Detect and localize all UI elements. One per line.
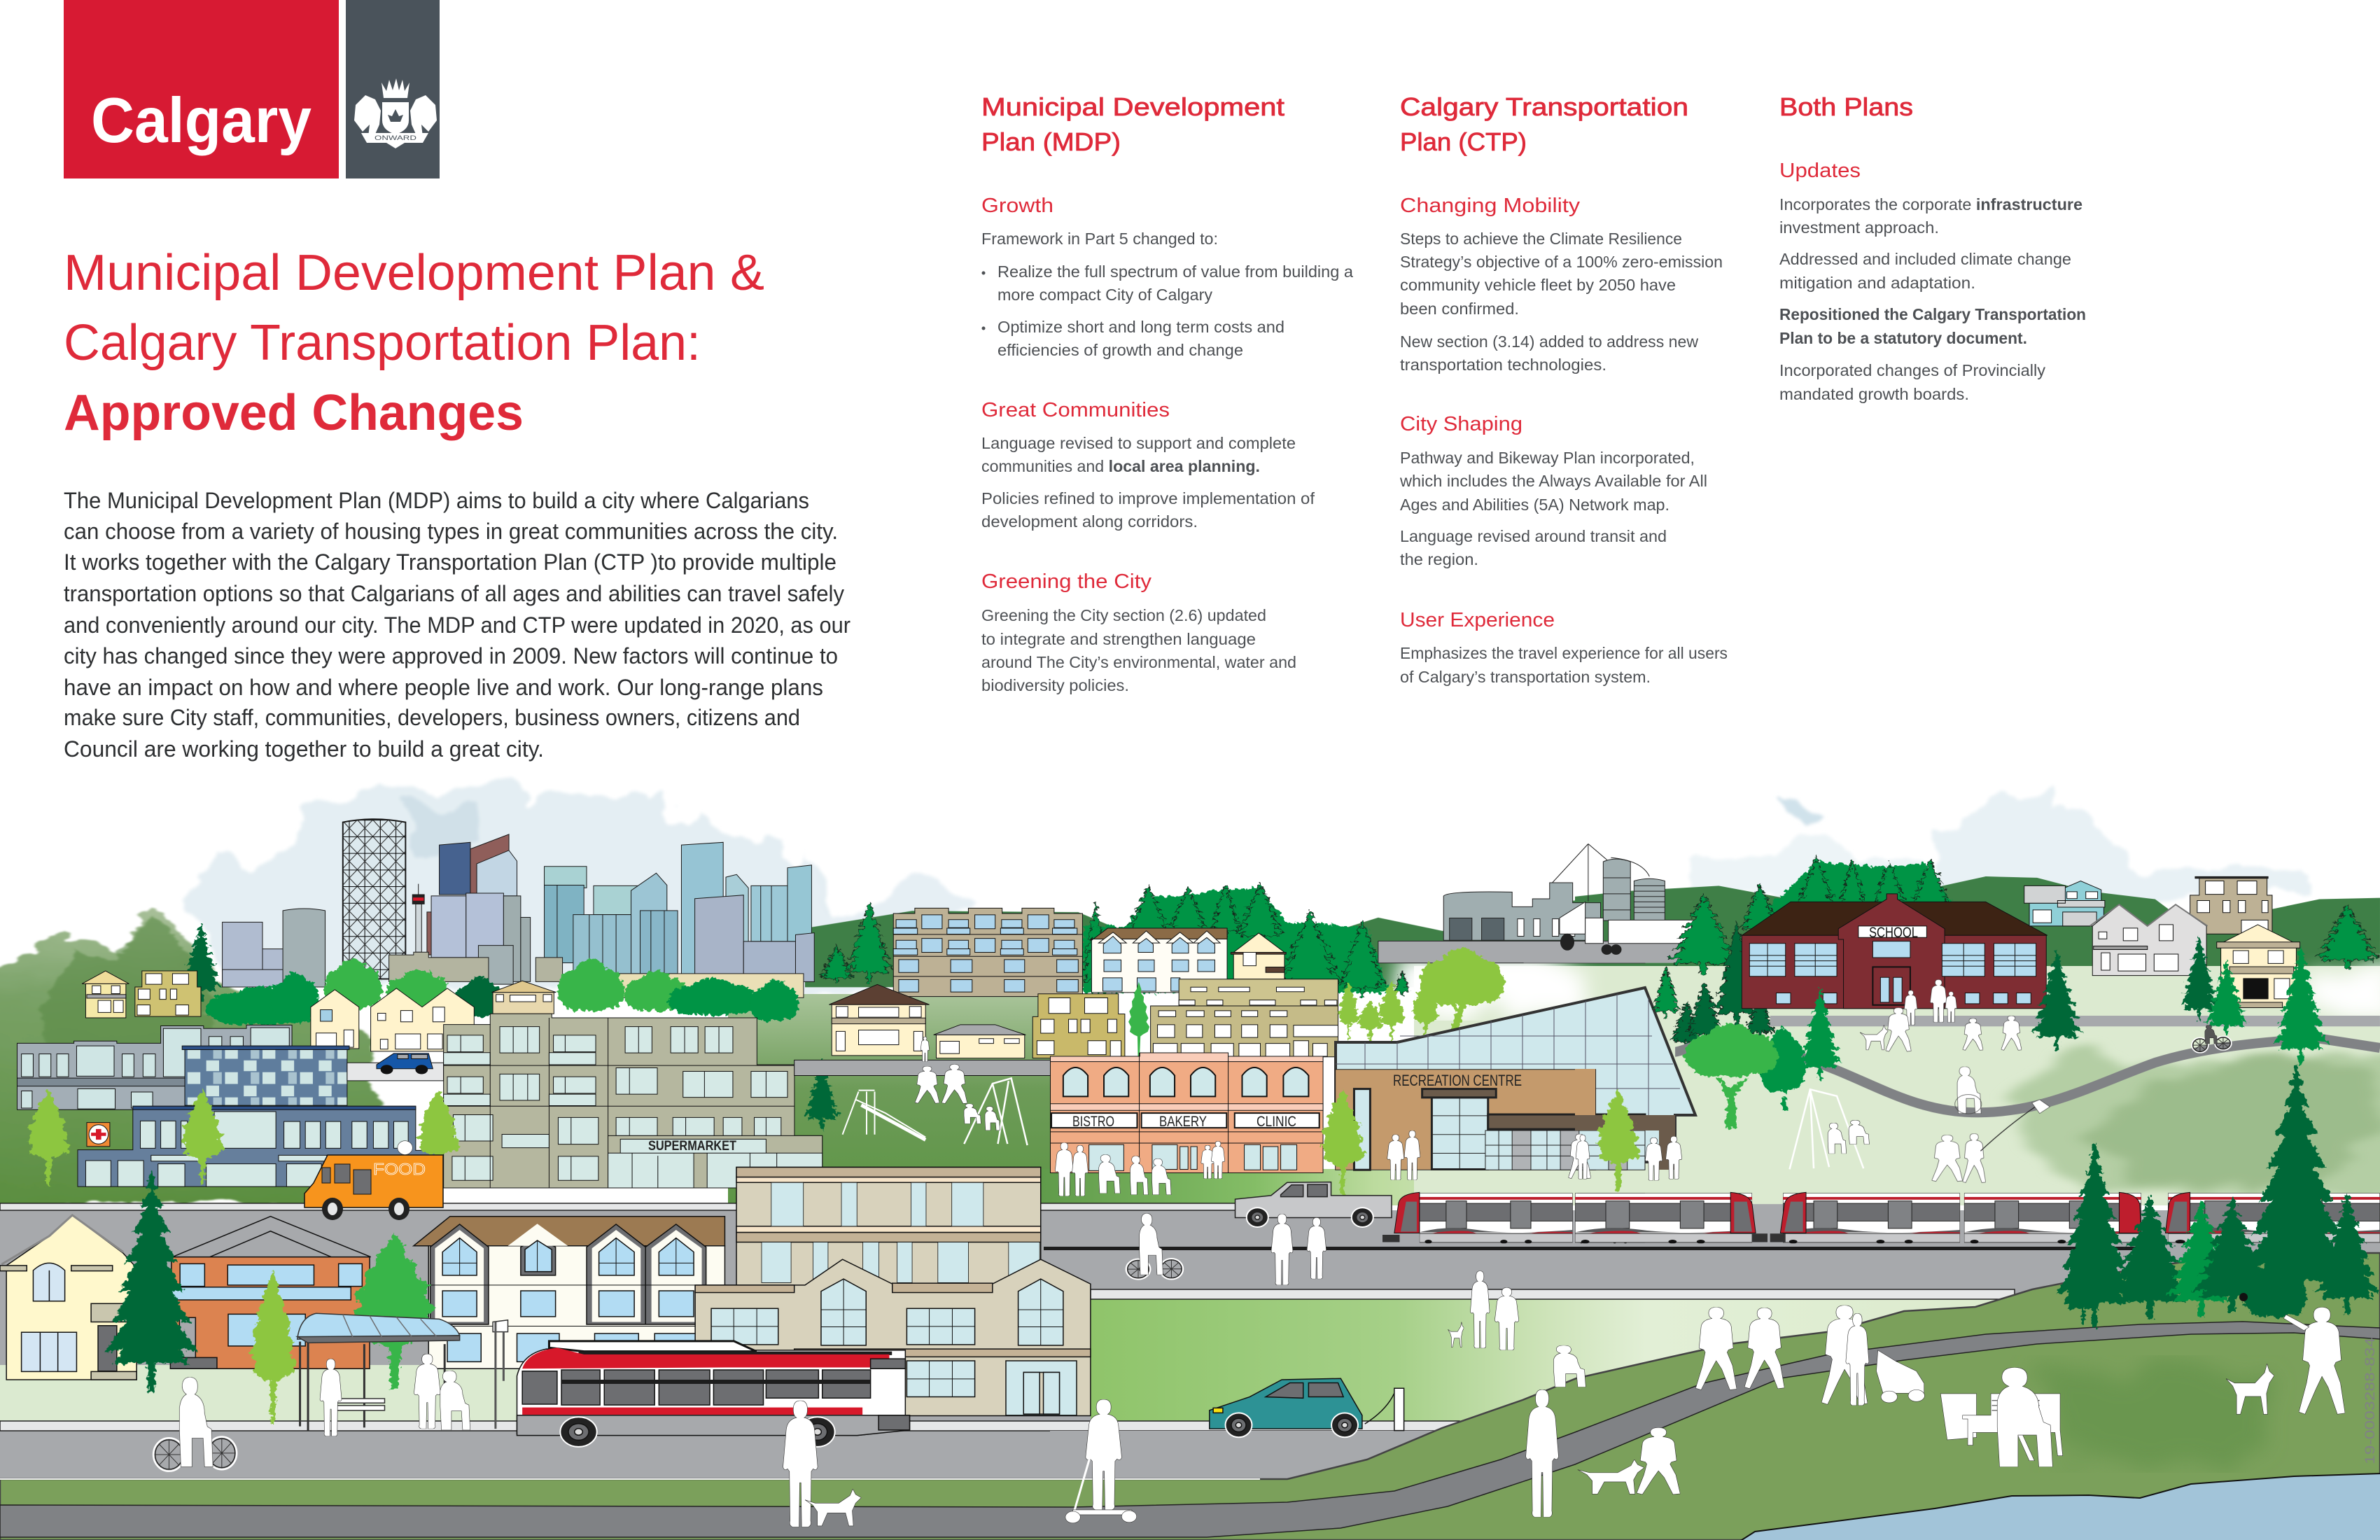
- heading: MDP: Municipal Development: [981, 92, 1284, 121]
- bungalow: [934, 1025, 1026, 1058]
- section: User Experience: of Calgary’s transportation system.: [1400, 668, 1651, 686]
- people: upper park and shops: [398, 979, 2231, 1196]
- truck label: FOOD: [373, 1160, 426, 1178]
- park pathway: [0, 1322, 2380, 1537]
- column: Both Plans: [1779, 92, 2086, 403]
- supermarket sign: SUPERMARKET: [648, 1139, 736, 1154]
- dog on leash: [805, 1489, 861, 1526]
- logo: City of Calgary: [64, 0, 440, 178]
- section: Changing Mobility: New section (3.14) added to address new: [1400, 332, 1699, 351]
- road surface: [0, 1210, 2380, 1479]
- document code: 19-0003288-8340: [2363, 1328, 2378, 1464]
- section: Great Communities: development along corridors.: [981, 512, 1198, 531]
- title: Calgary Transportation Plan:: [64, 315, 701, 371]
- school sign: SCHOOL: [1869, 925, 1918, 941]
- scooter riders: [1271, 1214, 1326, 1285]
- lower townhouses: [414, 1217, 724, 1368]
- icon: coat of arms: ONWARD: [374, 134, 417, 141]
- wash: central park: [728, 994, 1064, 1204]
- road bend at hill: [1050, 1431, 1449, 1479]
- upper-left houses and blocks: [17, 971, 840, 1188]
- intro text block: can choose from a variety of housing types in great communities across the city.: [64, 519, 838, 544]
- olive apartment: [135, 971, 201, 1016]
- section: City Shaping: Pathway and Bikeway Plan incorporated,: [1400, 449, 1695, 467]
- olive townhouse: [2190, 876, 2272, 934]
- checker facade: [182, 1046, 349, 1105]
- section: Great Communities: Policies refined to improve implementation of: [981, 489, 1315, 507]
- section: Growth: Framework in Part 5 changed to:: [981, 230, 1218, 248]
- lawn lower left: [0, 1365, 546, 1421]
- section: Updates: Repositioned the Calgary Transportation: [1779, 305, 2086, 323]
- houses upper right: [2024, 876, 2300, 1008]
- family at school: [1860, 979, 1956, 1051]
- midground conifers behind townhouses: [820, 883, 1410, 998]
- wheelchair user: [1955, 1067, 1982, 1114]
- slide: [843, 1091, 925, 1140]
- heading: Both Plans: Both Plans: [1779, 92, 1913, 121]
- waiting passengers: [320, 1354, 470, 1436]
- rec centre east end: [1575, 1115, 1675, 1170]
- trees behind recreation centre: [1338, 948, 1505, 1044]
- meadow road and winding path: [1675, 1016, 2380, 1112]
- section: Updates: mitigation and adaptation.: [1779, 274, 1975, 292]
- heading: CTP: [1400, 92, 1688, 156]
- shop signs: CLINIC: [1256, 1114, 1296, 1130]
- upper-left neighbourhood trees: [179, 923, 799, 1026]
- section: Updates: Updates: [1779, 160, 1861, 182]
- light-rail trains: [1382, 1192, 2380, 1244]
- section: User Experience: [1400, 609, 1728, 686]
- section: Changing Mobility: Steps to achieve the Climate Resilience: [1400, 230, 1682, 248]
- section: Growth: more compact City of Calgary: [997, 286, 1212, 304]
- intro text block: have an impact on how and where people live and work. Our long-range plans: [64, 675, 823, 700]
- heading: CTP: Calgary Transportation: [1400, 92, 1688, 121]
- meadow cyclist: [2192, 1025, 2231, 1052]
- logo wordmark: Calgary: [91, 85, 312, 156]
- runners: [1695, 1307, 1784, 1390]
- neighbourhood road: [794, 1060, 1051, 1076]
- school: [1742, 894, 2047, 1009]
- intro text block: Council are working together to build a great city.: [64, 736, 544, 762]
- heading: MDP: [981, 92, 1284, 156]
- foreground conifers right: [2055, 1064, 2380, 1328]
- grey-blue mid-rise: [17, 1025, 292, 1110]
- shops: Bistro Bakery Clinic: [1051, 1053, 1323, 1172]
- section: User Experience: User Experience: [1400, 609, 1555, 631]
- swing set: [964, 1078, 1028, 1145]
- meadow trees: [1684, 935, 2329, 1128]
- dog and crouching person: [1578, 1427, 1680, 1494]
- heading: MDP: Plan (MDP): [981, 127, 1121, 156]
- intro text block: It works together with the Calgary Transportation Plan (CTP )to provide multiple: [64, 550, 836, 575]
- icon: medical sign: [87, 1123, 110, 1147]
- section: Changing Mobility: community vehicle fleet by 2050 have: [1400, 276, 1676, 294]
- section: City Shaping: Ages and Abilities (5A) Network map.: [1400, 496, 1670, 514]
- recreation centre: [1336, 988, 1695, 1170]
- section: Growth: Realize the full spectrum of value from building a: [997, 262, 1354, 281]
- side road: [347, 1063, 444, 1081]
- lawn by mid-rise block: [1091, 1299, 2016, 1470]
- logo red block: [64, 0, 339, 178]
- section: Updates: investment approach.: [1779, 218, 1939, 237]
- dog jumping: [2226, 1364, 2274, 1414]
- section: Great Communities: communities and local area planning.: [981, 457, 1260, 475]
- wash: meadow shadow: [2011, 1039, 2380, 1194]
- section: City Shaping: which includes the Always Available for All: [1399, 472, 1707, 490]
- tan apartment block: [893, 908, 1082, 997]
- supermarket: [608, 1135, 822, 1188]
- section: Greening the City: Greening the City: [981, 570, 1152, 593]
- section: Updates: Addressed and included climate change: [1779, 250, 2071, 268]
- cream duplex: [371, 988, 474, 1051]
- bench and bin: [1940, 1394, 2063, 1461]
- light poplars at rec centre: [1320, 1089, 1641, 1195]
- children playing: [915, 1064, 967, 1104]
- bus shelter: [298, 1313, 508, 1431]
- wash: left woodland dark patch: [43, 915, 214, 1051]
- scooter rider: [1065, 1399, 1137, 1523]
- section: Greening the City: Greening the City section (2.6) updated: [981, 606, 1266, 624]
- icon: coat of arms: [354, 78, 437, 148]
- cyclist: [153, 1377, 237, 1471]
- diners and patio crowd: [1055, 1141, 1225, 1196]
- teal house: [2024, 881, 2105, 926]
- mid sidewalk: [1091, 1289, 2015, 1299]
- section: Growth: efficiencies of growth and change: [997, 341, 1243, 359]
- icon: frisbee: [2239, 1293, 2248, 1301]
- shop signs: [1072, 1114, 1296, 1130]
- title: Approved Changes: [64, 385, 524, 441]
- section: Great Communities: [981, 399, 1315, 531]
- grey duplex: [2090, 904, 2208, 976]
- section: Growth: [981, 195, 1354, 359]
- cypress: [1128, 982, 1149, 1057]
- factory: [1378, 844, 1645, 963]
- section: Greening the City: around The City’s environmental, water and: [981, 653, 1296, 671]
- ground watercolor washes: [0, 906, 2380, 1205]
- front gabled building: [695, 1259, 1091, 1416]
- intro text block: make sure City staff, communities, developers, business owners, citizens and: [64, 705, 800, 730]
- hillside grass: [0, 1253, 2380, 1540]
- column: Municipal Development Plan: [981, 92, 1354, 694]
- section: Greening the City: to integrate and strengthen language: [981, 630, 1256, 648]
- shop signs: BAKERY: [1159, 1114, 1207, 1130]
- Calgary Tower: [412, 884, 424, 952]
- wash: white gaps: [1393, 959, 2380, 1015]
- tram rail: [1044, 1247, 2164, 1250]
- column: Calgary Transportation Plan: [1399, 92, 1728, 686]
- kerb line: [0, 1478, 1260, 1480]
- section: Great Communities: Language revised to support and complete: [981, 434, 1296, 452]
- heading: CTP: Plan (CTP): [1400, 127, 1527, 156]
- section: Changing Mobility: transportation technologies.: [1400, 356, 1606, 374]
- white townhouses: [1091, 928, 1227, 993]
- swing set meadow: [1790, 1089, 1863, 1169]
- section: Greening the City: biodiversity policies.: [981, 676, 1129, 694]
- bus: [517, 1341, 909, 1447]
- lower sidewalk: [0, 1421, 1460, 1431]
- silos and truck: [1524, 858, 1698, 963]
- adult lifting child: [1526, 1345, 1586, 1517]
- light poplars left: [27, 1058, 840, 1185]
- section: City Shaping: the region.: [1400, 550, 1478, 568]
- wash: left woodland: [0, 906, 375, 1204]
- section: Changing Mobility: Changing Mobility: [1400, 195, 1581, 217]
- section: Growth: Optimize short and long term costs and: [997, 318, 1284, 336]
- section: Updates: Plan to be a statutory document.: [1779, 329, 2027, 347]
- section: City Shaping: [1399, 413, 1707, 568]
- wash: meadow darker patch: [2088, 1057, 2376, 1186]
- olive walk-up: [1032, 994, 1125, 1058]
- section: User Experience: Emphasizes the travel experience for all users: [1400, 644, 1728, 662]
- intro text block: [64, 488, 850, 762]
- section: Greening the City: [981, 570, 1296, 694]
- hillside shading: [2030, 1365, 2275, 1463]
- yellow house: [82, 971, 129, 1018]
- icon: blue car: [377, 1054, 433, 1074]
- couple with stroller: [1821, 1306, 1924, 1406]
- upper sidewalk: [0, 1203, 1253, 1210]
- upper-right trees behind school: [1652, 856, 2380, 1048]
- Bow tower: [343, 819, 405, 979]
- lower orange building: [170, 1217, 371, 1368]
- background: sky watercolor washes: [193, 780, 2360, 1014]
- logo grey block: [346, 0, 440, 178]
- couple walking dog: [1448, 1271, 1519, 1350]
- small gabled house: [1231, 933, 1286, 979]
- tram-street cyclist: [1126, 1213, 1183, 1279]
- people: streets and lawn: [153, 1213, 2345, 1527]
- cream house: [311, 990, 359, 1049]
- midground housing: [794, 908, 1338, 1076]
- background: distant hills: [805, 876, 2380, 987]
- section: Great Communities: Great Communities: [981, 399, 1170, 421]
- couple at rec centre: [1387, 1130, 1420, 1180]
- shop signs: BISTRO: [1072, 1114, 1114, 1130]
- bus body: [517, 1349, 905, 1436]
- children with kite: [1932, 1100, 2050, 1183]
- section: Changing Mobility: been confirmed.: [1400, 300, 1519, 318]
- food truck vendor: [398, 1141, 412, 1155]
- intro text block: city has changed since they were approved in 2009. New factors will continue to: [64, 643, 838, 668]
- person throwing frisbee: [2283, 1307, 2345, 1414]
- section: City Shaping: City Shaping: [1400, 413, 1522, 435]
- lower left house: [0, 1215, 136, 1380]
- intro text block: and conveniently around our city. The MDP and CTP were updated in 2020, as our: [64, 612, 850, 638]
- section: Growth: Growth: [981, 195, 1054, 217]
- foreground lower trees: [104, 1170, 440, 1424]
- section: City Shaping: Language revised around transit and: [1400, 527, 1667, 545]
- rec centre sign: RECREATION CENTRE: [1393, 1072, 1522, 1089]
- section: Changing Mobility: Strategy’s objective of a 100% zero-emission: [1400, 253, 1723, 271]
- section: Updates: Incorporated changes of Provincially: [1779, 361, 2045, 379]
- brown-roof house: [829, 984, 930, 1056]
- section: Updates: Incorporates the corporate infrastructure: [1779, 195, 2082, 214]
- pickup truck: [1236, 1182, 1392, 1227]
- intro text block: transportation options so that Calgarians of all ages and abilities can travel safely: [64, 581, 844, 606]
- food truck: [304, 1155, 443, 1220]
- blue low-rise: [78, 1106, 442, 1186]
- tan house: [492, 981, 556, 1014]
- beige mixed-use block: [736, 1168, 1041, 1292]
- section: Changing Mobility: [1400, 195, 1723, 374]
- wash: patio lawn: [1036, 1169, 1582, 1205]
- title: [64, 245, 764, 441]
- section: Updates: mandated growth boards.: [1779, 385, 1969, 403]
- title: Municipal Development Plan &: [64, 245, 764, 301]
- yellow house: [2217, 925, 2300, 1008]
- section: Updates: [1779, 160, 2086, 403]
- large beige mid-rise: [444, 1014, 822, 1188]
- electric car and charger: [1210, 1378, 1404, 1437]
- bus wheels: [560, 1417, 835, 1447]
- charger: [1365, 1388, 1404, 1431]
- river: [1740, 1474, 2380, 1540]
- skyline: [223, 819, 814, 997]
- glass atrium: [1336, 988, 1695, 1162]
- wash: pale meadow: [1414, 966, 2380, 1205]
- person with dog, left: [783, 1401, 818, 1527]
- olive terraces: [1151, 979, 1338, 1057]
- roads and sidewalks: [0, 1203, 2380, 1479]
- intro text block: The Municipal Development Plan (MDP) aims to build a city where Calgarians: [64, 488, 809, 513]
